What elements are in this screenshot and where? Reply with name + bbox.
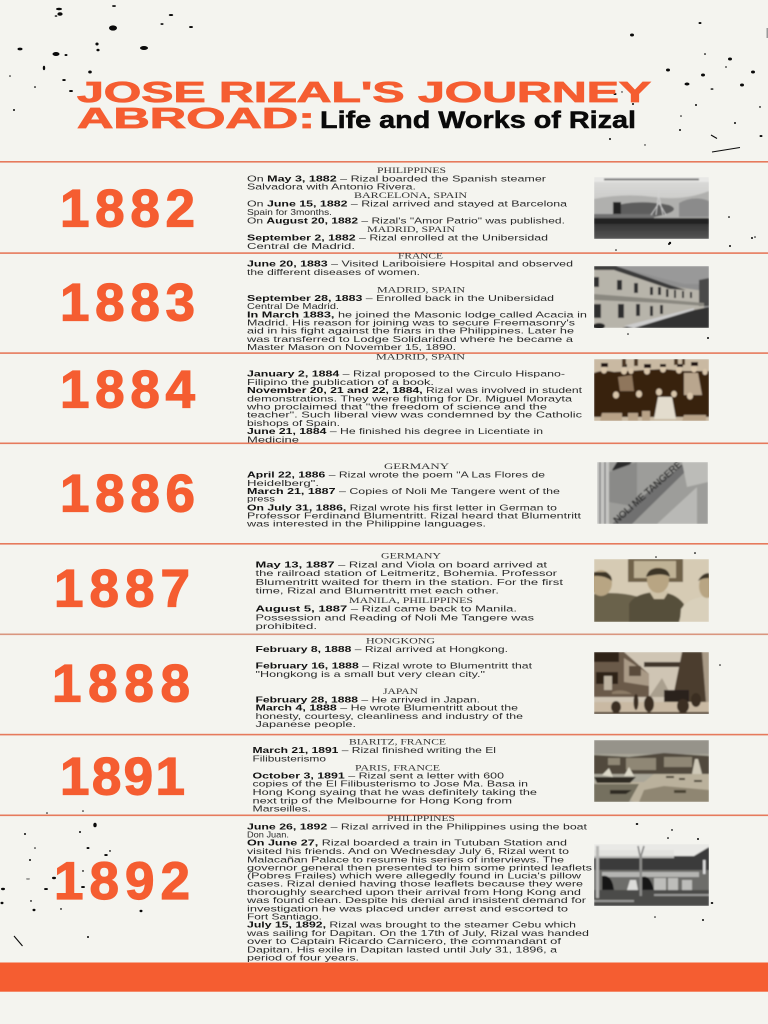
panel: 1892 bbox=[54, 814, 709, 962]
text block 1888: honesty, courtesy, cleanliness and industry of the bbox=[256, 712, 524, 721]
text block 1883: June 20, 1883 – Visited Lariboisiere Hospital and observed bbox=[247, 260, 573, 269]
text block 1887 bbox=[256, 552, 564, 631]
text block 1891 bbox=[252, 738, 538, 813]
text block 1884: who proclaimed that "the freedom of science and the bbox=[245, 403, 548, 412]
text block 1882: September 2, 1882 – Rizal enrolled at the Unibersidad bbox=[247, 234, 548, 243]
text block 1888: March 4, 1888 – He wrote Blumentritt about the bbox=[256, 703, 519, 712]
text block 1892: PHILIPPINES bbox=[387, 814, 456, 823]
text block 1884: June 21, 1884 – He finished his degree in Licentiate in bbox=[247, 427, 543, 436]
text block 1891: next trip of the Melbourne for Hong Kong from bbox=[252, 796, 512, 805]
text block 1884 bbox=[245, 352, 583, 444]
text block 1882: Salvadora with Antonio Rivera. bbox=[247, 182, 416, 192]
text block 1883: aid in his fight against the friars in the Philippines. Later he bbox=[247, 327, 575, 336]
text block 1882: PHILIPPINES bbox=[377, 166, 447, 175]
text block 1888: February 28, 1888 – He arrived in Japan. bbox=[256, 695, 480, 704]
text block 1892: Fort Santiago. bbox=[247, 913, 322, 922]
text block 1884: Medicine bbox=[247, 436, 300, 444]
text block 1888: February 16, 1888 – Rizal wrote to Blumentritt that bbox=[256, 662, 533, 671]
text block 1882: On May 3, 1882 – Rizal boarded the Spanish steamer bbox=[247, 175, 546, 184]
text block 1892: Don Juan. bbox=[247, 830, 289, 839]
text block 1883 bbox=[245, 252, 587, 352]
text block 1891: Marseilles. bbox=[252, 804, 311, 813]
text block 1884: November 20, 21 and 22, 1884, Rizal was involved in student bbox=[247, 386, 583, 395]
text block 1892: investigation he was placed under arrest and escorted to bbox=[247, 904, 569, 913]
text block 1888: February 8, 1888 – Rizal arrived at Hongkong. bbox=[256, 645, 508, 654]
text block 1887: prohibited. bbox=[256, 622, 317, 631]
text block 1883: Central De Madrid. bbox=[247, 302, 339, 311]
photo: steamer ship bbox=[594, 177, 709, 239]
text block 1886: press bbox=[247, 495, 275, 504]
title bbox=[77, 77, 651, 135]
text block 1891: PARIS, FRANCE bbox=[355, 763, 440, 772]
text block 1884: Filipino the publication of a book. bbox=[247, 378, 434, 387]
text block 1883: the different diseases of women. bbox=[247, 268, 420, 277]
text block 1883: Master Mason on November 15, 1890. bbox=[247, 343, 456, 352]
text block 1884: January 2, 1884 – Rizal proposed to the Circulo Hispano- bbox=[247, 370, 565, 379]
text block 1884: demonstrations. They were fighting for Dr. Miguel Morayta bbox=[247, 395, 573, 404]
photo: Fort Santiago grounds bbox=[594, 844, 709, 906]
photo: Madrid building bbox=[594, 266, 709, 328]
text block 1887: the railroad station of Leitmeritz, Bohemia. Professor bbox=[256, 569, 557, 578]
text block 1884: teacher". Such liberal view was condemned by the Catholic bbox=[247, 411, 582, 420]
text block 1891: March 21, 1891 – Rizal finished writing the El bbox=[252, 746, 496, 755]
text block 1888: HONGKONG bbox=[366, 637, 435, 646]
text block 1888: "Hongkong is a small but very clean city." bbox=[256, 670, 485, 679]
text block 1883: FRANCE bbox=[398, 252, 443, 261]
year 1884: 1884 bbox=[60, 360, 196, 420]
text block 1892: June 26, 1892 – Rizal arrived in the Philippines using the boat bbox=[247, 822, 588, 831]
text block 1892: was sailing for Dapitan. On the 17th of July, Rizal was handed bbox=[245, 929, 589, 938]
text block 1887: August 5, 1887 – Rizal came back to Manila. bbox=[256, 604, 517, 613]
text block 1891: Filibusterismo bbox=[252, 754, 327, 763]
text block 1883: September 28, 1883 – Enrolled back in the Unibersidad bbox=[247, 294, 554, 303]
text block 1884: bishops of Spain. bbox=[247, 419, 340, 428]
text block 1886: March 21, 1887 – Copies of Noli Me Tangere went of the bbox=[247, 487, 561, 496]
year 1887: 1887 bbox=[54, 560, 190, 618]
photo: Marseilles harbour bbox=[594, 740, 709, 802]
text block 1892: cases. Rizal denied having those leaflets because they were bbox=[247, 880, 584, 889]
text block 1882 bbox=[247, 166, 568, 251]
year 1891: 1891 bbox=[60, 748, 185, 806]
text block 1882: BARCELONA, SPAIN bbox=[354, 191, 467, 200]
text block 1882: On August 20, 1882 – Rizal's "Amor Patrio" was published. bbox=[247, 216, 565, 225]
panel: 1882 bbox=[60, 166, 709, 251]
text block 1891: copies of the El Filibusterismo to Jose Ma. Basa in bbox=[252, 780, 528, 789]
text block 1887: GERMANY bbox=[381, 552, 441, 561]
photo: Noli Me Tangere cover bbox=[597, 459, 708, 526]
text block 1892: Dapitan. His exile in Dapitan lasted until July 31, 1896, a bbox=[247, 945, 558, 954]
year 1883: 1883 bbox=[60, 274, 195, 332]
text block 1883: Madrid. His reason for joining was to secure Freemasonry's bbox=[247, 319, 575, 328]
text block 1887: MANILA, PHILIPPINES bbox=[349, 596, 474, 605]
text block 1882: On June 15, 1882 – Rizal arrived and stayed at Barcelona bbox=[247, 200, 568, 209]
title: Life and Works of Rizal bbox=[320, 107, 636, 134]
panel: 1891 bbox=[60, 738, 709, 813]
panel: 1884 bbox=[60, 352, 709, 444]
text block 1892: governor general then presented to him some printed leaflets bbox=[247, 863, 592, 872]
text block 1887: time, Rizal and Blumentritt met each other. bbox=[256, 587, 499, 596]
text block 1892: July 15, 1892, Rizal was brought to the steamer Cebu which bbox=[247, 921, 576, 930]
text block 1891: BIARITZ, FRANCE bbox=[349, 738, 446, 747]
text block 1882: Spain for 3months. bbox=[247, 208, 332, 217]
text block 1887: Possession and Reading of Noli Me Tangere was bbox=[256, 613, 534, 622]
text block 1892: (Pobres Frailes) which were allegedly found in Lucia's pillow bbox=[247, 872, 581, 881]
panel: 1888 bbox=[52, 637, 709, 729]
title: JOSE RIZAL'S JOURNEY bbox=[77, 77, 651, 109]
text block 1883: was transferred to Lodge Solidaridad where he became a bbox=[245, 335, 574, 344]
year 1892: 1892 bbox=[54, 852, 190, 911]
text block 1888 bbox=[256, 637, 533, 729]
text block 1883: In March 1883, he joined the Masonic lodge called Acacia in bbox=[247, 310, 587, 319]
text block 1892: thoroughly searched upon their arrival from Hong Kong and bbox=[247, 888, 581, 897]
text block 1892: over to Captain Ricardo Carnicero, the commandant of bbox=[247, 937, 562, 946]
text block 1892: Malacañan Palace to resume his series of interviews. The bbox=[247, 855, 565, 864]
text block 1892: was found clean. Despite his denial and insistent demand for bbox=[245, 896, 586, 905]
photo: Hongkong street bbox=[594, 652, 709, 714]
text block 1887: Blumentritt waited for them in the station. For the first bbox=[256, 578, 564, 587]
text block 1888: JAPAN bbox=[383, 687, 418, 696]
year 1882: 1882 bbox=[60, 180, 195, 238]
text block 1886: was interested in the Philippine languages. bbox=[245, 520, 486, 529]
text block 1892: On June 27, Rizal boarded a train in Tutuban Station and bbox=[247, 839, 567, 848]
text block 1892 bbox=[245, 814, 592, 962]
text block 1886: April 22, 1886 – Rizal wrote the poem "A Las Flores de bbox=[247, 470, 546, 479]
text block 1886 bbox=[245, 462, 582, 529]
title: ABROAD: bbox=[77, 103, 315, 135]
text block 1892: period of four years. bbox=[247, 953, 359, 962]
year 1888: 1888 bbox=[52, 654, 190, 714]
panel: 1887 bbox=[54, 552, 715, 631]
text block 1891: October 3, 1891 – Rizal sent a letter with 600 bbox=[252, 772, 505, 781]
panel: 1883 bbox=[60, 252, 709, 352]
photo: portrait of three men bbox=[594, 559, 709, 622]
text block 1886: Heidelberg". bbox=[247, 479, 319, 488]
text block 1882: MADRID, SPAIN bbox=[367, 225, 455, 234]
text block 1884: MADRID, SPAIN bbox=[376, 352, 465, 361]
text block 1892: visited his friends. And on Wednesday July 6, Rizal went to bbox=[247, 847, 570, 856]
text block 1886: Professor Ferdinand Blumentritt. Rizal heard that Blumentritt bbox=[247, 511, 582, 520]
photo: Noli Me Tangere cover: NOLI ME TANGERE bbox=[612, 459, 685, 526]
text block 1883: MADRID, SPAIN bbox=[377, 285, 465, 294]
text block 1886: GERMANY bbox=[384, 462, 449, 471]
text block 1887: May 13, 1887 – Rizal and Viola on board arrived at bbox=[256, 561, 548, 570]
year 1886: 1886 bbox=[60, 464, 195, 524]
panel: 1886 bbox=[60, 459, 708, 529]
photo: group portrait bbox=[594, 359, 709, 421]
text block 1882: Central de Madrid. bbox=[247, 242, 355, 251]
text block 1886: On July 31, 1886, Rizal wrote his first letter in German to bbox=[247, 503, 558, 512]
text block 1891: Hong Kong syaing that he was definitely taking the bbox=[252, 788, 538, 797]
footer bar bbox=[0, 962, 768, 992]
text block 1888: Japanese people. bbox=[256, 720, 356, 729]
